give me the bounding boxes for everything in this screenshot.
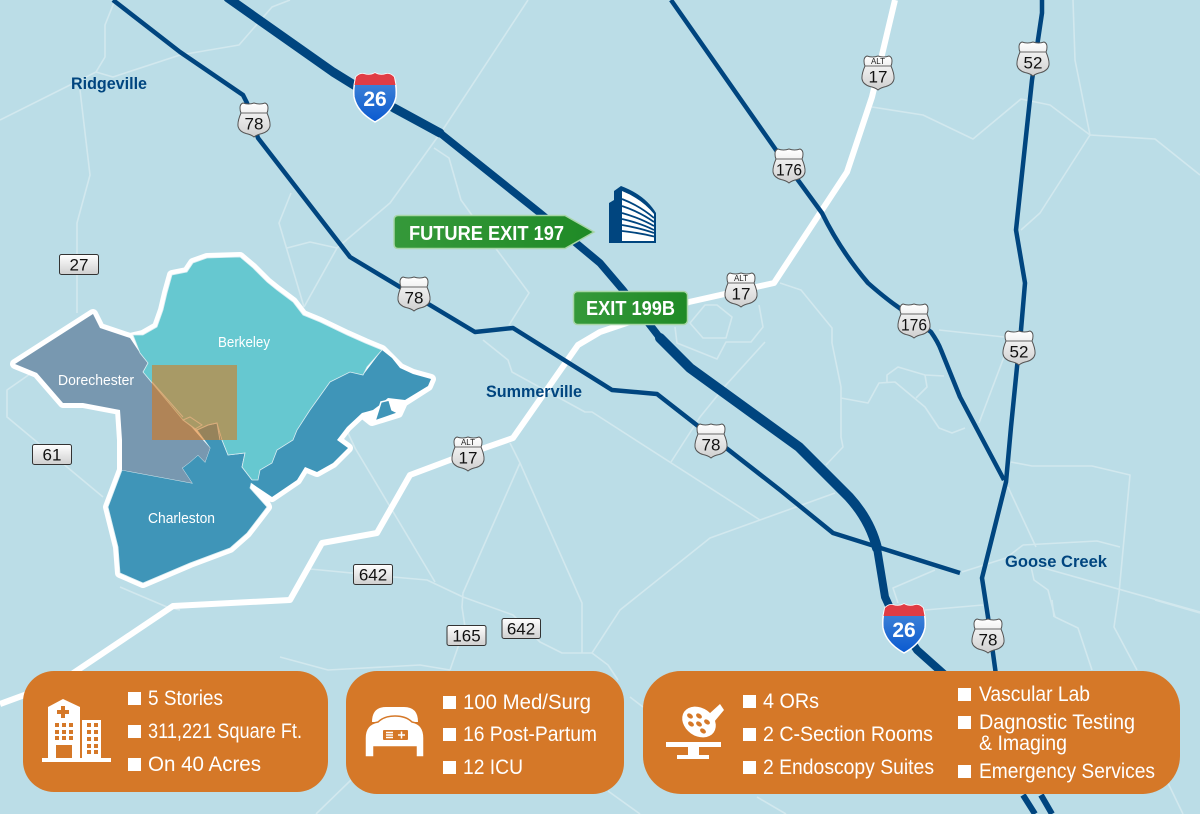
- list: other services: Dagnostic Testing: [979, 711, 1135, 734]
- place label: Summerville: Summerville: [486, 382, 582, 401]
- county: Dorchester: [15, 314, 210, 483]
- sign: Future Exit 197: FUTURE EXIT 197: [409, 223, 564, 245]
- list: bed counts: [443, 691, 597, 779]
- shield: ALT 17: ALT: [461, 438, 475, 447]
- route marker: 27: 27: [70, 256, 88, 274]
- shield: US 78: 78: [702, 436, 720, 454]
- shield: US 78: 78: [405, 288, 423, 308]
- route marker: 61: [32, 444, 72, 464]
- list: other services: Vascular Lab: [979, 683, 1090, 706]
- route marker: 27: [60, 254, 98, 274]
- panel: bed counts: [346, 671, 624, 794]
- shield: US 176: [898, 304, 930, 338]
- place label: Goose Creek: Goose Creek: [1005, 552, 1108, 571]
- route marker: 642: [354, 564, 392, 584]
- list: bed counts: 12 ICU: [463, 756, 523, 779]
- road: US 176: [671, 0, 1004, 480]
- shield: ALT 17: ALT: [734, 274, 748, 283]
- list: bed counts: 100 Med/Surg: [463, 691, 591, 714]
- shield: US 52: 52: [1024, 54, 1042, 72]
- label: Charleston: Charleston: [148, 510, 215, 527]
- shield: interstate 26 north: 26: [363, 88, 387, 111]
- list: procedure rooms: 2 Endoscopy Suites: [763, 756, 934, 779]
- shield: US 176: 176: [776, 160, 802, 180]
- shield: ALT 17: [725, 273, 757, 307]
- road: interstate 26 south of panels: [1023, 795, 1052, 814]
- list: other services: & Imaging: [979, 732, 1067, 755]
- hospital service area square: [152, 365, 237, 440]
- shield: US 78: [972, 619, 1004, 653]
- county map: [15, 257, 431, 583]
- panel: services: [643, 671, 1180, 794]
- road: interstate 26: [228, 0, 945, 675]
- shield: US 52: [1017, 42, 1049, 76]
- list: building facts: [128, 687, 302, 776]
- shield: ALT 17: [452, 437, 484, 471]
- list: procedure rooms: 2 C-Section Rooms: [763, 723, 933, 746]
- sign: Exit 199B: [574, 292, 688, 324]
- list: building facts: On 40 Acres: [148, 753, 261, 776]
- list: procedure rooms: 4 ORs: [763, 690, 819, 713]
- list: bed counts: 16 Post-Partum: [463, 723, 597, 746]
- list: other services: Emergency Services: [979, 760, 1155, 783]
- icon: surgical lamp and table: [666, 700, 724, 759]
- shield: US 176: [773, 149, 805, 183]
- road: US 78: [113, 0, 960, 573]
- list: procedure rooms: [743, 690, 934, 779]
- icon: hospital bed: [365, 707, 424, 757]
- shield: interstate 26 south: 26: [892, 619, 916, 642]
- shield: US 52: [1003, 331, 1035, 365]
- shield: US 78: [238, 103, 270, 137]
- shield: US 52: 52: [1010, 342, 1028, 362]
- county map white outline: [15, 257, 431, 583]
- place label: Ridgeville: Ridgeville: [71, 74, 147, 93]
- icon: hospital: [42, 699, 111, 762]
- county: Charleston east: [250, 350, 431, 497]
- county: Charleston island: [375, 400, 398, 421]
- sign: Future Exit 197: [394, 216, 594, 248]
- route marker: 642: 642: [507, 620, 535, 638]
- route marker: 642: 642: [359, 566, 387, 584]
- icon: hospital tower: [609, 186, 656, 243]
- shield: US 78: 78: [245, 114, 263, 134]
- shield: ALT 17: 17: [732, 284, 750, 304]
- county boundary detail: [152, 382, 220, 440]
- county: Charleston: [108, 423, 267, 583]
- shield: US 176: 176: [901, 316, 927, 334]
- shield: interstate 26 south: [883, 604, 925, 653]
- shield: ALT 17: 17: [869, 68, 887, 86]
- road: US 52: [982, 0, 1042, 675]
- list: other services: [958, 683, 1155, 783]
- shield: ALT 17: 17: [459, 448, 477, 468]
- panel: building facts: [23, 671, 328, 792]
- shield: interstate 26 north: [354, 73, 396, 122]
- list: building facts: 5 Stories: [148, 687, 223, 710]
- county: Berkeley: [133, 257, 382, 480]
- shield: ALT 17: [862, 56, 894, 90]
- shield: ALT 17: ALT: [871, 57, 885, 66]
- route marker: 61: 61: [43, 446, 61, 464]
- route marker: 165: 165: [452, 626, 481, 646]
- route marker: 165: [447, 626, 486, 646]
- list: building facts: 311,221 Square Ft.: [148, 720, 302, 743]
- shield: US 78: [695, 424, 727, 458]
- shield: US 78: 78: [979, 630, 997, 650]
- label: Berkeley: Berkeley: [218, 334, 270, 351]
- white road: ALT 17: [0, 0, 895, 704]
- sign: Exit 199B: EXIT 199B: [586, 298, 675, 320]
- shield: US 78: [398, 277, 430, 311]
- label: Dorechester: Dorechester: [58, 372, 134, 389]
